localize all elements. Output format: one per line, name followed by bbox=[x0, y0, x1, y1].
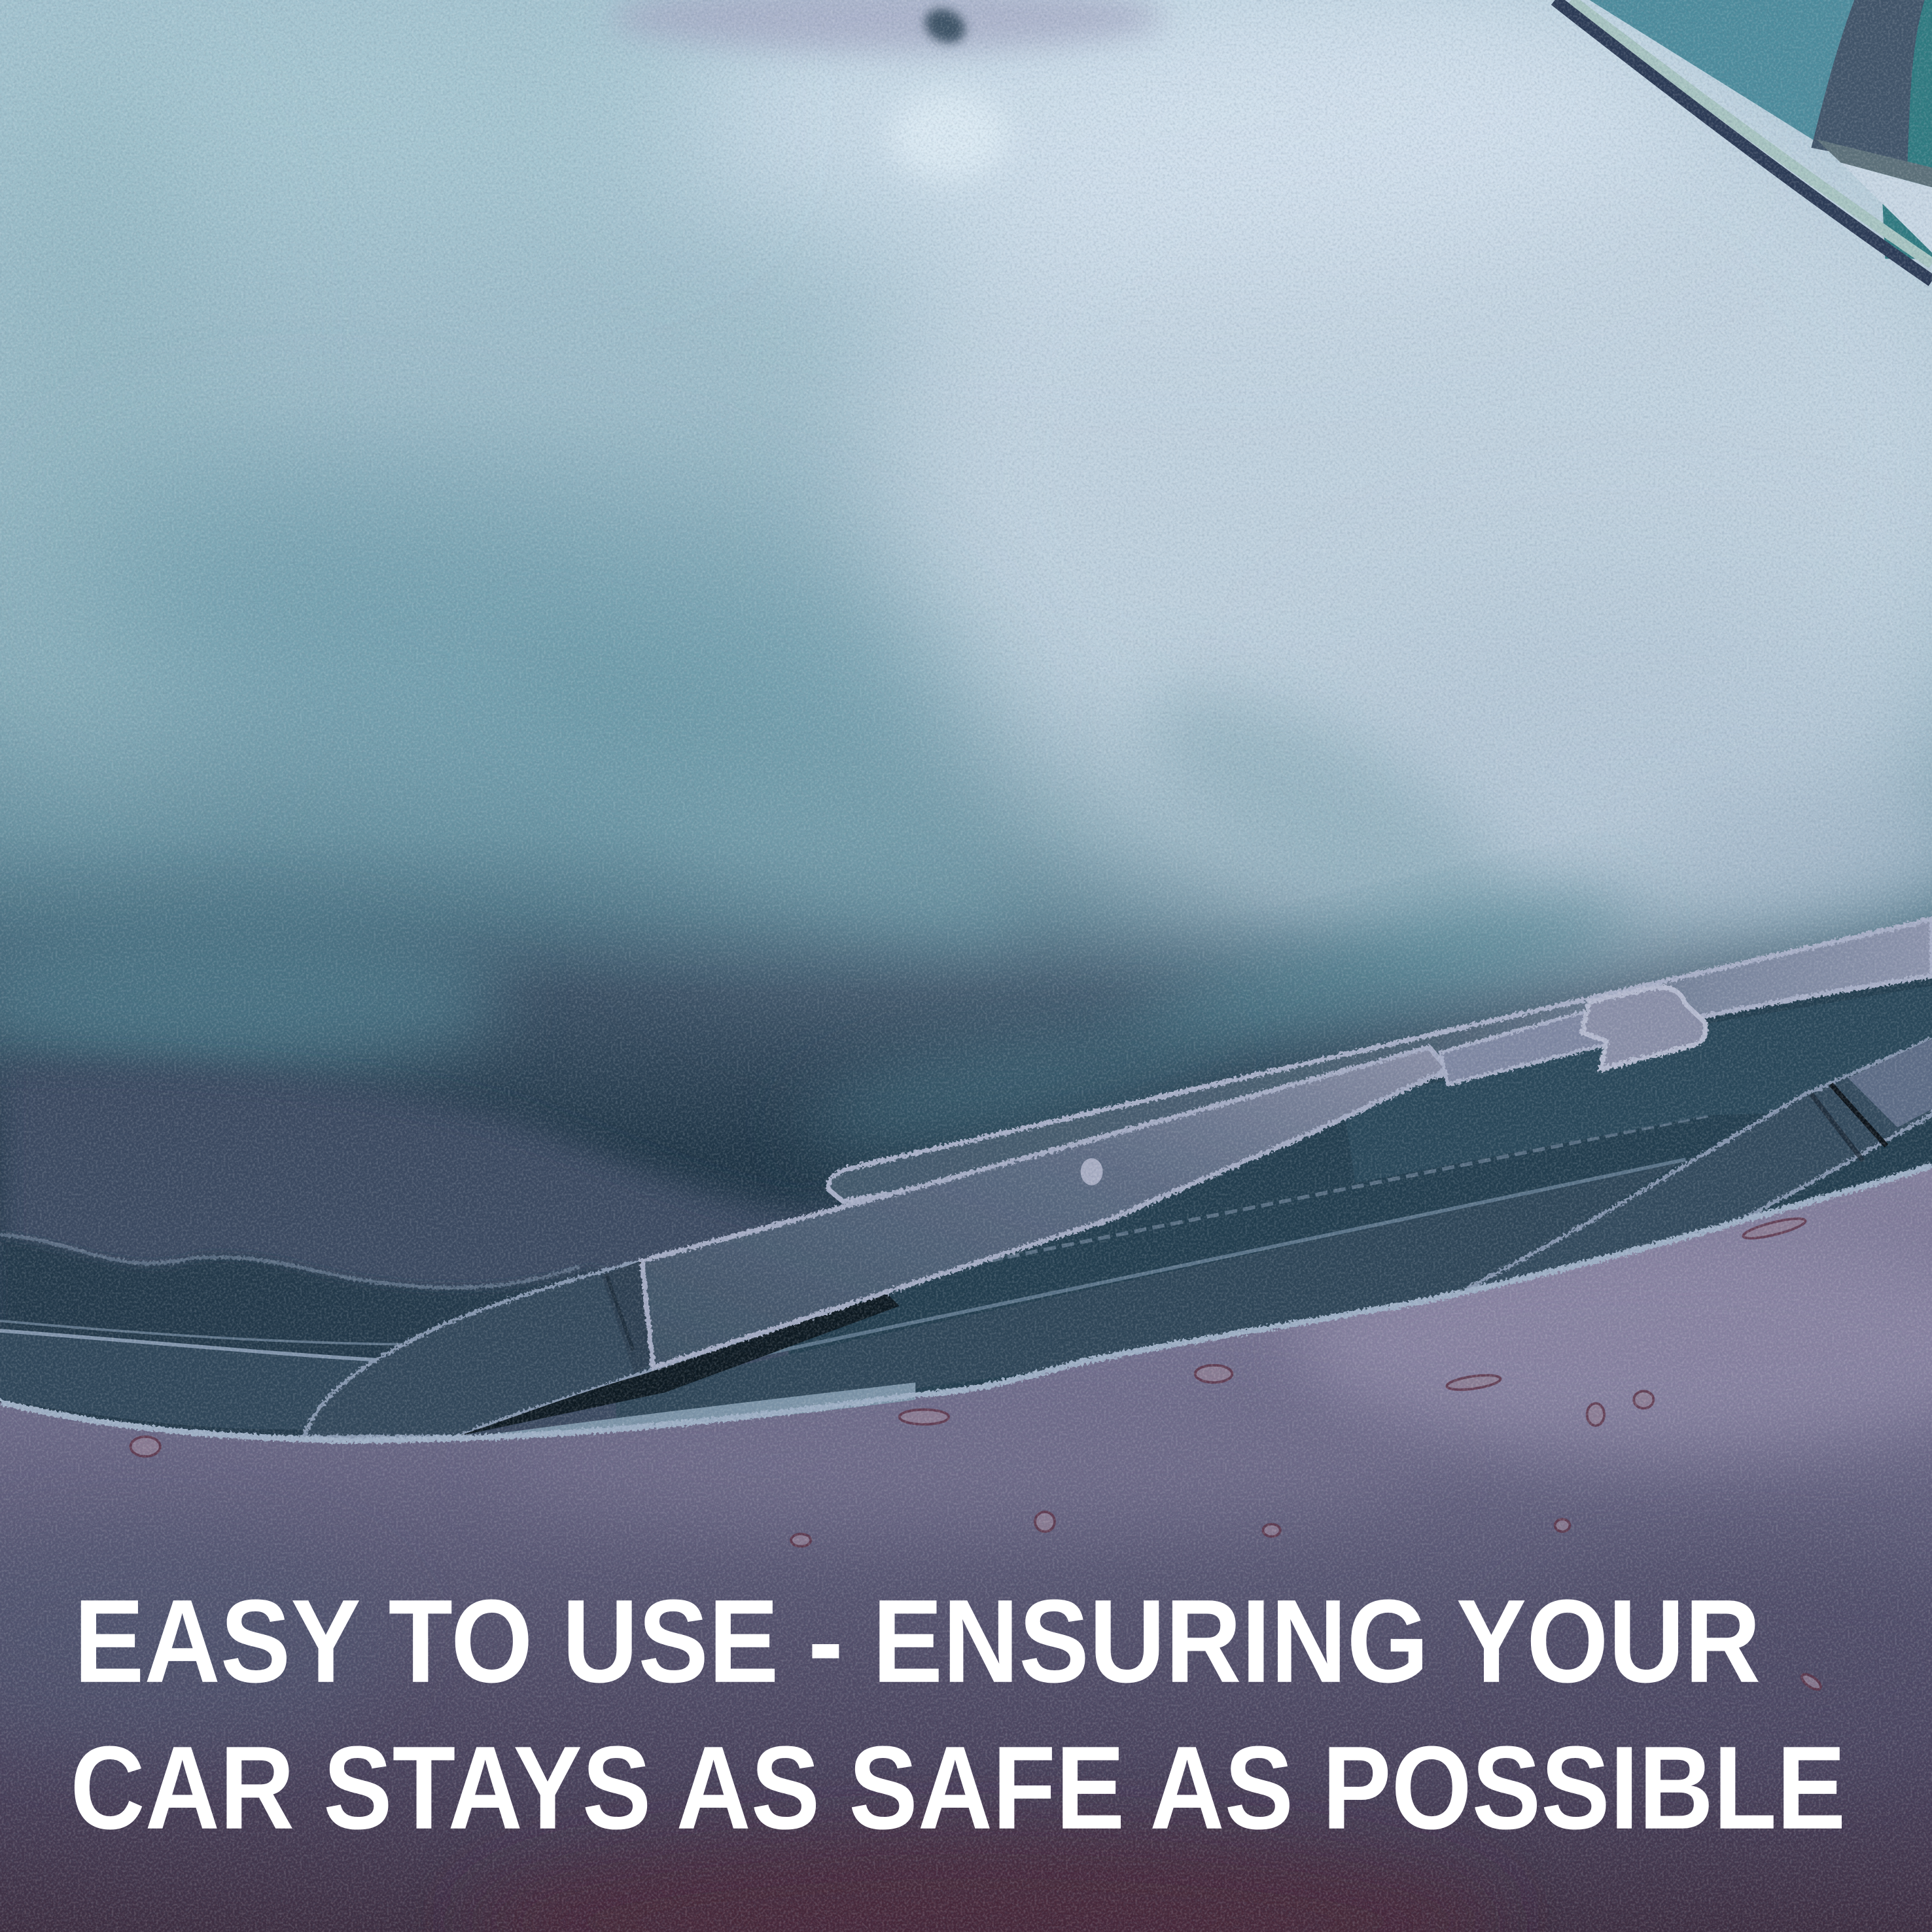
panel: right wiper blade bbox=[1466, 1039, 1932, 1289]
frost boundary line bbox=[0, 1235, 579, 1288]
caption line one: EASY TO USE - ENSURING YOUR bbox=[74, 1575, 1761, 1708]
heading: caption text bbox=[70, 1575, 1846, 1854]
panel: left wiper arm bbox=[303, 1187, 915, 1437]
light frost strip along bonnet edge bbox=[456, 1382, 915, 1439]
panel: frosted car bonnet bbox=[0, 1166, 1932, 1932]
panel: main wiper arm bbox=[642, 987, 1706, 1367]
dark unfrosted lower glass bbox=[0, 1064, 838, 1454]
icon: rear-view mirror mount shadow bbox=[610, 0, 1165, 180]
panel: cowl recess behind wipers bbox=[788, 974, 1932, 1417]
panel: lower wiper blade sheet bbox=[616, 986, 1932, 1430]
icon: left wiper rubber strips bbox=[0, 1321, 403, 1430]
panel: top right window and roof trim bbox=[1555, 0, 1932, 281]
icon: wiper arm end cap bbox=[1582, 987, 1706, 1070]
panel: upper wiper housing bbox=[828, 919, 1932, 1201]
inner dark band at base of glass bbox=[0, 1237, 690, 1454]
icon: arm rivet bbox=[1081, 1158, 1103, 1186]
panel: frosted windscreen bbox=[0, 0, 1932, 1437]
icon: water droplets on bonnet bbox=[131, 1215, 1823, 1693]
